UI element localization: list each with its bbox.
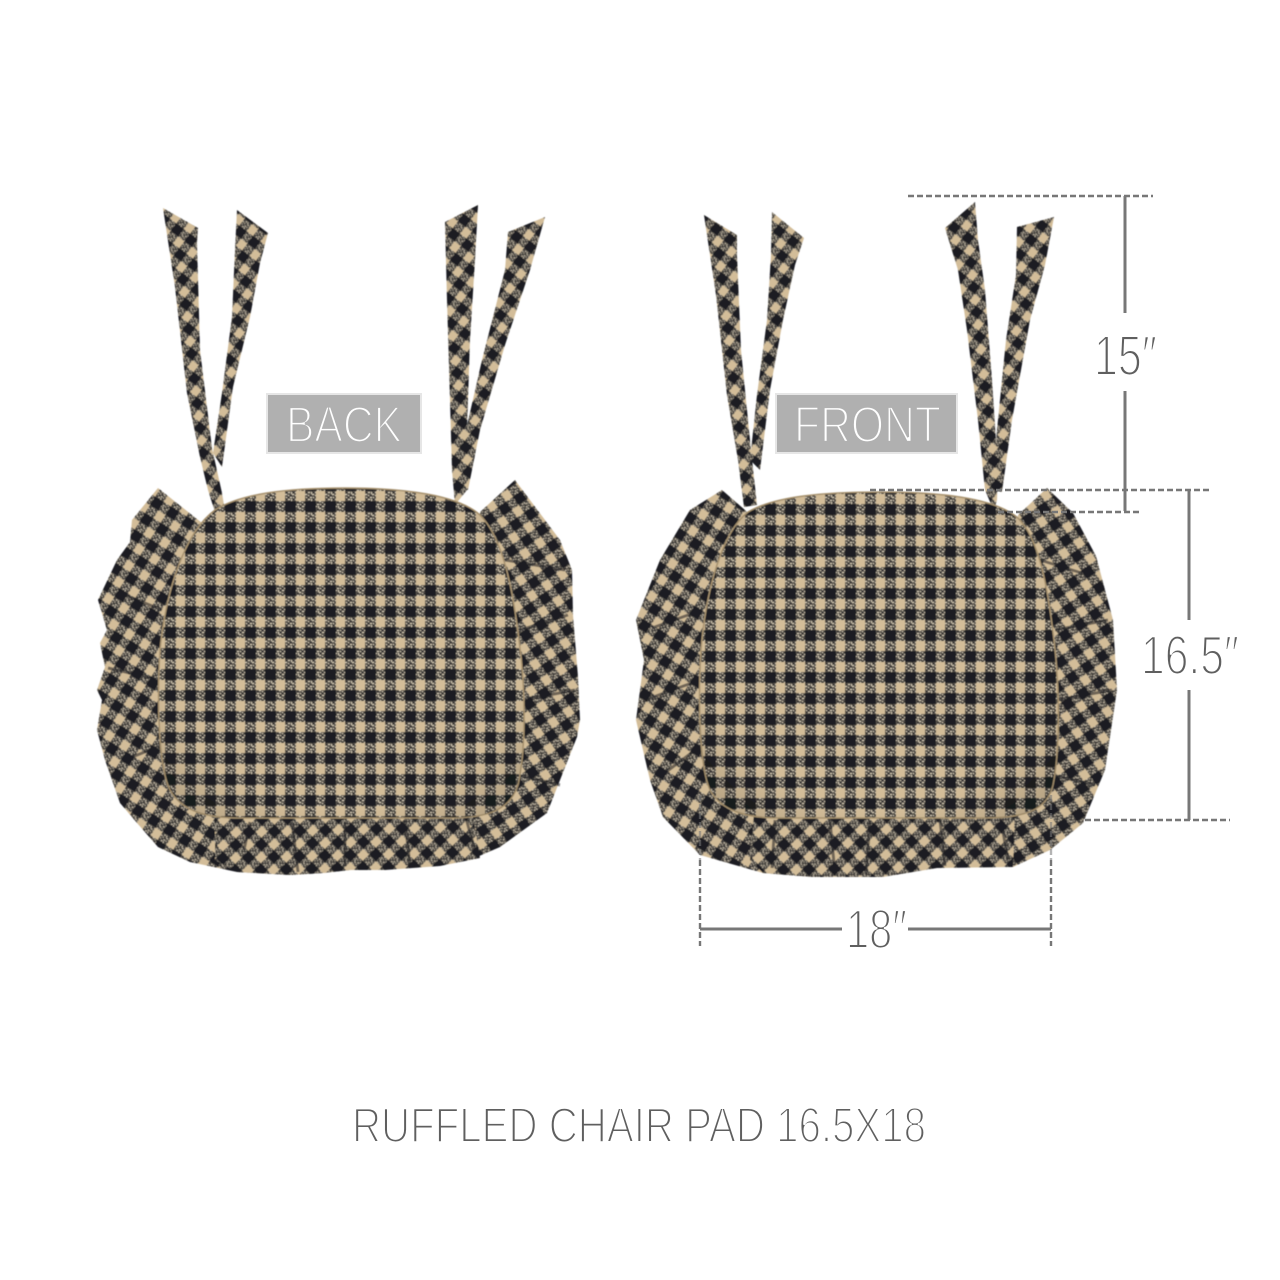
- chair pad: back view: [97, 205, 580, 875]
- back ruffle: [97, 488, 350, 875]
- back seat shading: [159, 488, 524, 818]
- back ties: [163, 205, 545, 512]
- dimension: tie length 15 inches: [908, 196, 1157, 512]
- dimension: pad width 18 inches: 18″: [846, 898, 907, 960]
- chair pad: front view: [636, 202, 1117, 877]
- front ruffle bottom: [750, 800, 1015, 877]
- dimension: pad width 18 inches: [700, 795, 1051, 960]
- front seat: [700, 492, 1058, 818]
- front ties: [704, 202, 1054, 511]
- back ruffle pleats: [108, 560, 575, 872]
- front ruffle: [636, 490, 883, 877]
- label: BACK: BACK: [286, 396, 402, 453]
- back seat: [159, 488, 524, 818]
- dimension: pad height 16.5 inches: [870, 490, 1239, 820]
- back ruffle bottom: [215, 800, 480, 875]
- label: FRONT: FRONT: [794, 396, 941, 453]
- front ruffle right side: [980, 488, 1117, 867]
- title: RUFFLED CHAIR PAD 16.5X18: [352, 1099, 926, 1153]
- back ruffle right side: [440, 480, 580, 860]
- front ruffle pleats: [645, 560, 1112, 874]
- front seat shading: [700, 492, 1058, 818]
- dimension: tie length 15 inches: 15″: [1094, 324, 1157, 388]
- dimension: pad height 16.5 inches: 16.5″: [1141, 624, 1239, 686]
